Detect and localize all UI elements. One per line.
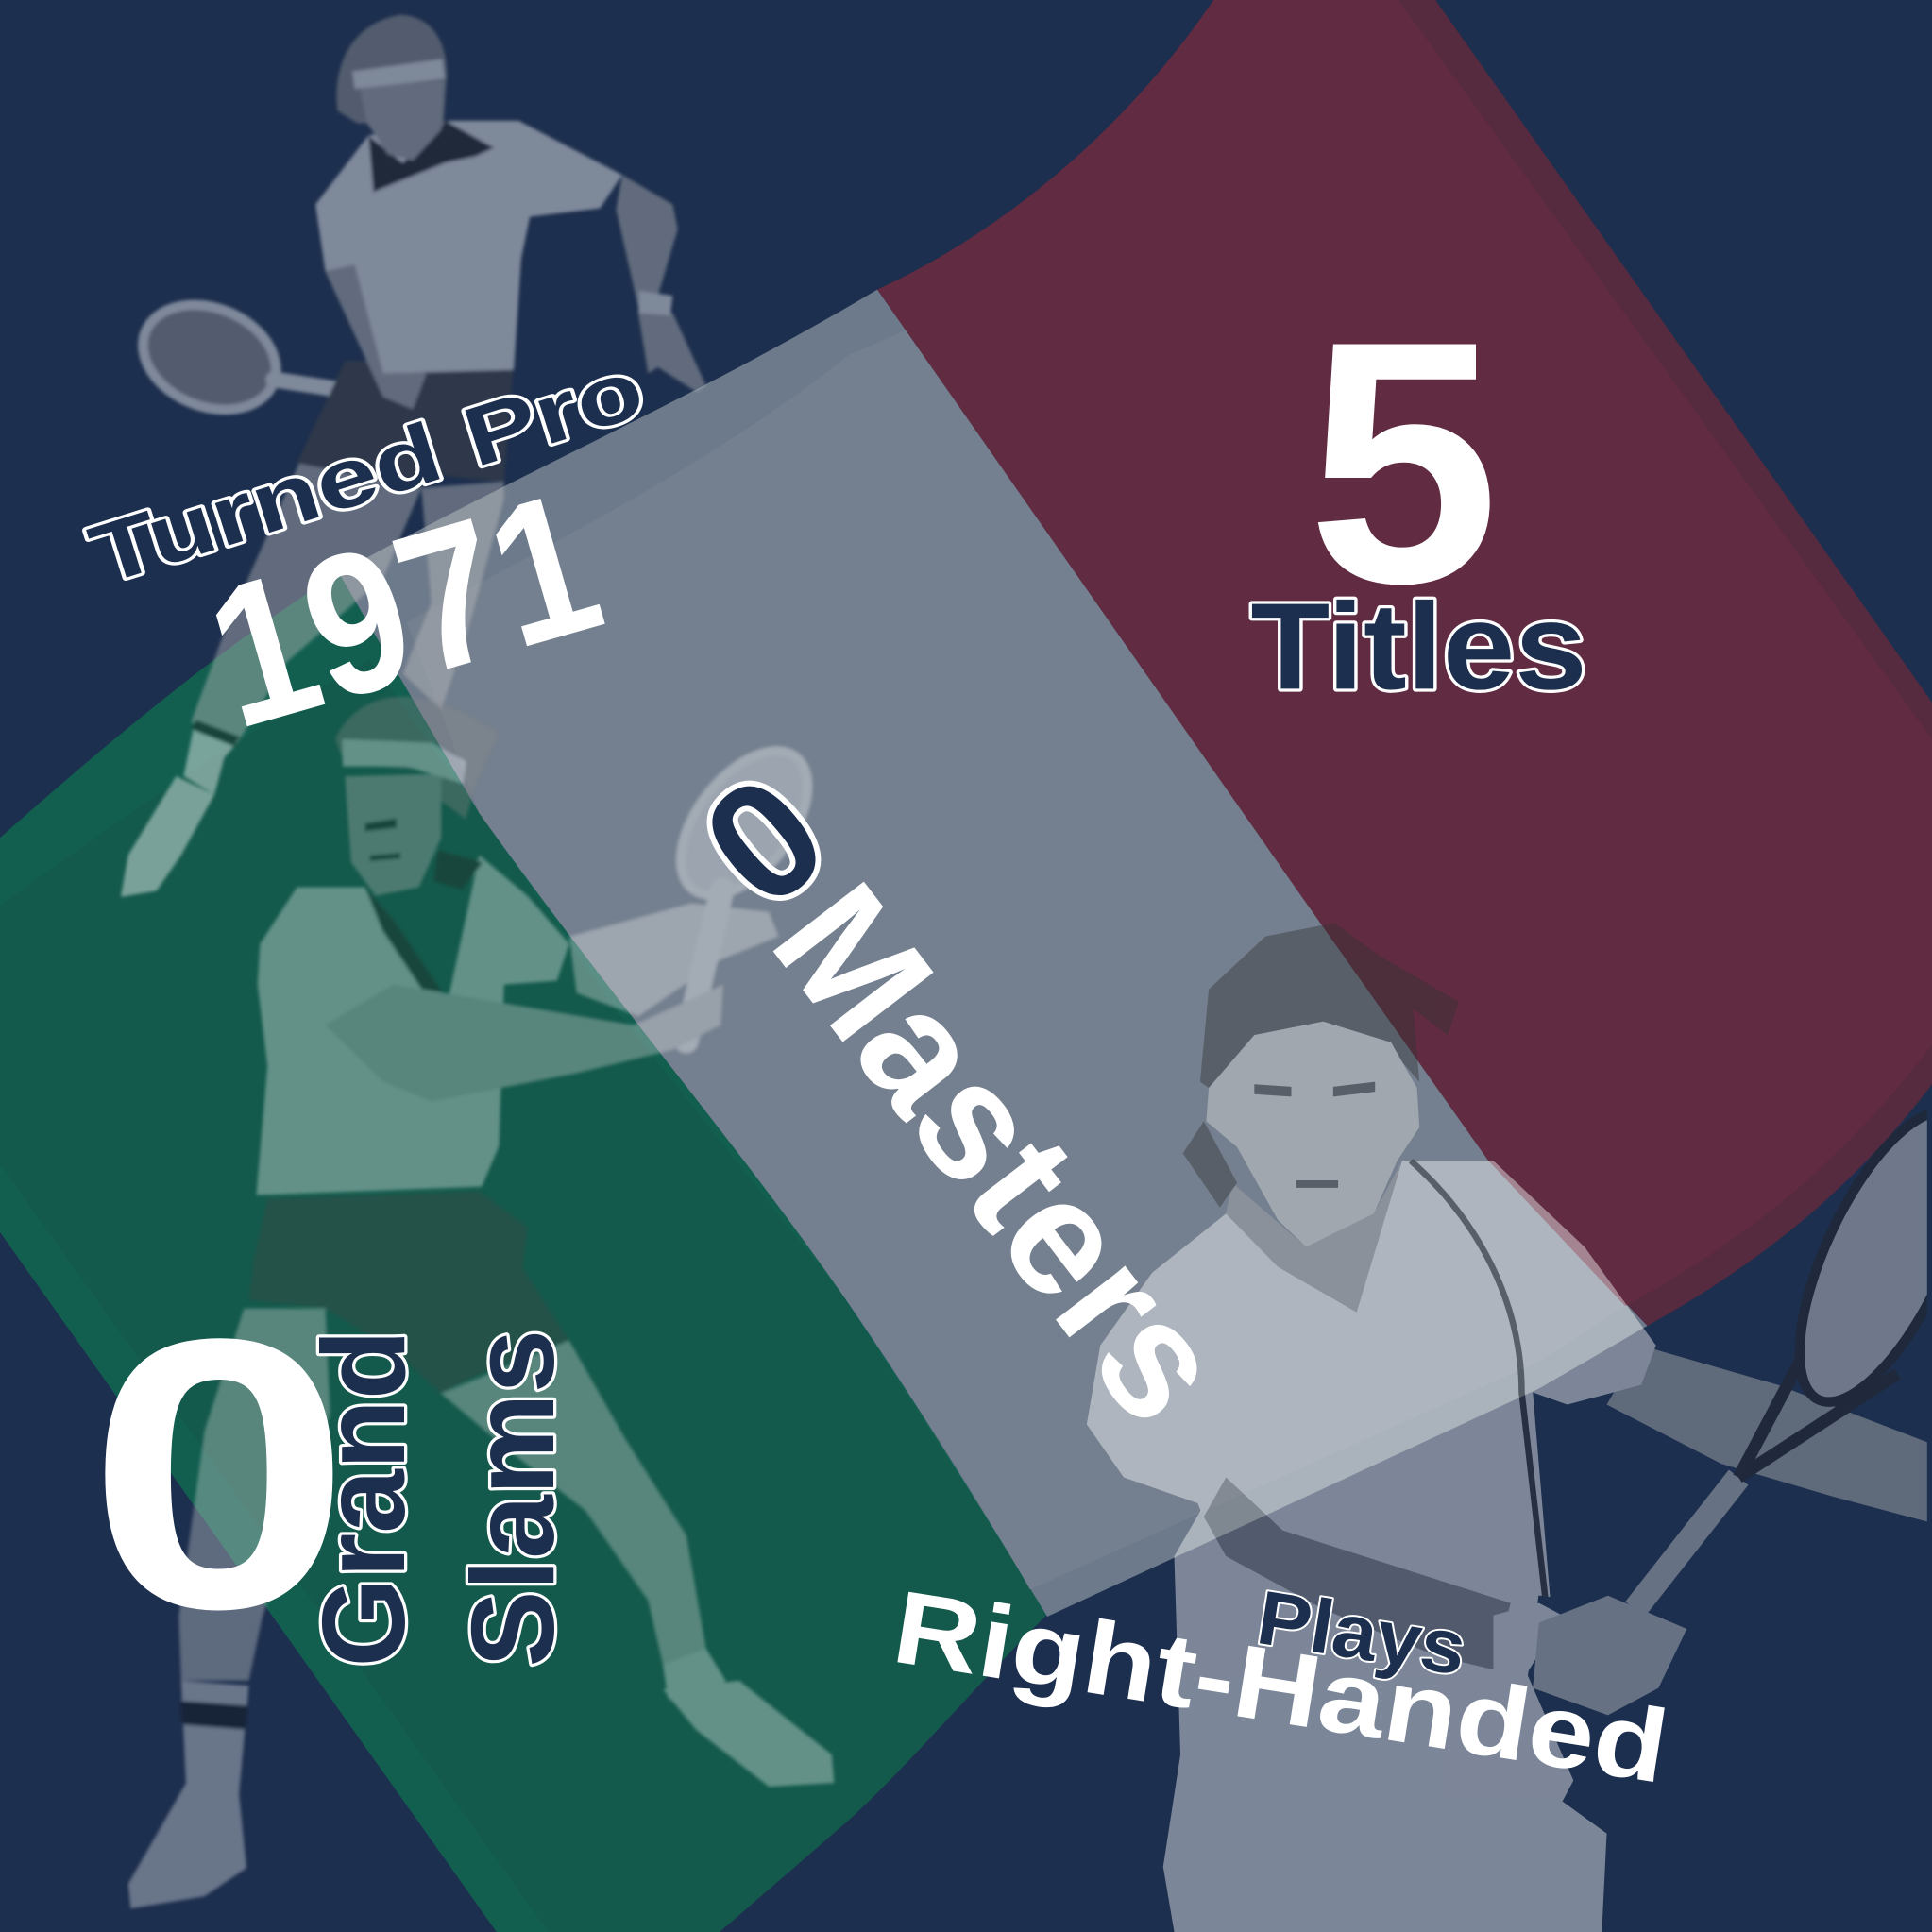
hand bbox=[1533, 1596, 1686, 1715]
panel: flag green stripe bbox=[0, 563, 1047, 1932]
face bbox=[1206, 1022, 1419, 1247]
headband bbox=[343, 739, 466, 784]
racket bbox=[655, 728, 833, 1042]
stat: masters label: Masters bbox=[737, 852, 1262, 1455]
front leg bbox=[441, 1341, 706, 1665]
hair back bbox=[1183, 1121, 1237, 1208]
stat: titles label: Titles bbox=[1250, 577, 1587, 715]
back arm bbox=[569, 903, 779, 1016]
stat: turned pro label: Turned Pro bbox=[79, 341, 654, 602]
player photo: centre backhand bbox=[128, 697, 834, 1908]
shirt stripe bbox=[1411, 1161, 1545, 1597]
shorts bbox=[249, 1192, 569, 1394]
face bbox=[360, 81, 444, 161]
front forearm bbox=[325, 985, 723, 1102]
stat: 5: 5 bbox=[1308, 270, 1500, 655]
stat: plays label: Plays bbox=[1252, 1575, 1472, 1692]
racket bbox=[127, 286, 369, 429]
collar bbox=[368, 121, 494, 193]
player photo: top left forehand bbox=[121, 15, 706, 897]
stat: 0 masters number: 0 bbox=[669, 740, 859, 941]
front shoe bbox=[663, 1681, 834, 1787]
shorts bbox=[297, 361, 514, 488]
forearm bbox=[1204, 1478, 1511, 1669]
racket bbox=[1635, 1089, 1932, 1609]
arms bbox=[325, 175, 706, 409]
back sock bbox=[181, 1681, 249, 1794]
legs bbox=[191, 457, 504, 740]
stat: 1971: 1971 bbox=[187, 449, 621, 771]
socks and shoe bbox=[121, 720, 240, 897]
lower shirt bbox=[1163, 1509, 1607, 1932]
neck bbox=[1226, 1161, 1402, 1313]
player photo: bottom right forehand bbox=[1087, 923, 1932, 1932]
hair bbox=[335, 697, 499, 820]
back leg bbox=[178, 1309, 330, 1681]
shirt bbox=[256, 856, 569, 1195]
wristband bbox=[638, 291, 672, 315]
back shoe bbox=[128, 1783, 246, 1908]
front sock bbox=[663, 1649, 726, 1714]
shirt bbox=[315, 121, 622, 373]
hair bbox=[336, 15, 447, 123]
panel: flag red stripe bbox=[877, 0, 1932, 1326]
shirt bbox=[1087, 1161, 1656, 1597]
headband bbox=[352, 59, 445, 89]
stat: slams label: Slams bbox=[449, 1330, 579, 1667]
wristband bbox=[1494, 1603, 1560, 1671]
stat: right-handed: Right-Handed bbox=[886, 1569, 1676, 1805]
right arm bbox=[1607, 1346, 1932, 1523]
headband and hair bbox=[1200, 923, 1459, 1088]
stat: 0 grand slams number: 0 bbox=[86, 1260, 352, 1689]
facial features bbox=[1254, 1082, 1375, 1188]
face bbox=[345, 773, 441, 896]
panel: flag grey stripe bbox=[339, 290, 1648, 1617]
collar bbox=[364, 850, 483, 1020]
stat: grand label: Grand bbox=[299, 1330, 430, 1667]
dark facial features bbox=[364, 818, 400, 861]
sock stripe bbox=[180, 1701, 247, 1730]
